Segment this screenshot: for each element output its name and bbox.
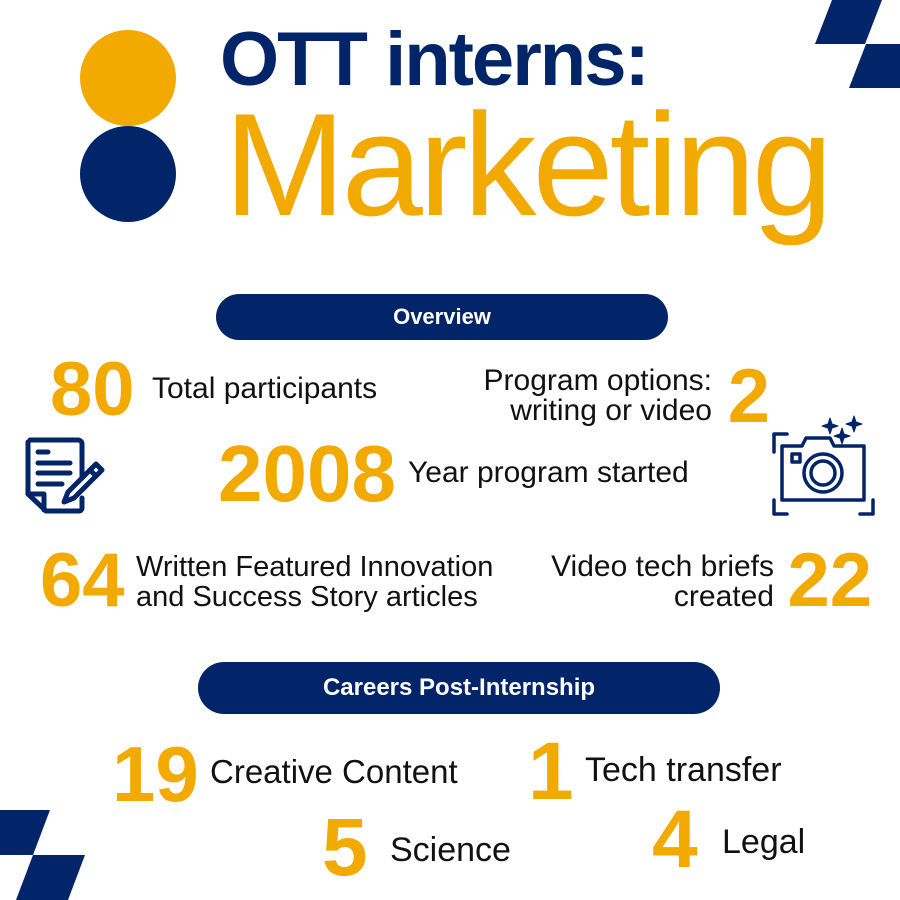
stat: 2: writing or video (510, 394, 712, 427)
heading: Careers Post-Internship (198, 662, 720, 714)
stat: 64: and Success Story articles (136, 581, 478, 613)
stat: 64: 64 (40, 538, 125, 623)
stat: 22 (551, 538, 872, 623)
stat: 2008 (218, 429, 689, 518)
stat: 80: 80 (50, 347, 135, 432)
career: 1 (528, 726, 782, 817)
title: Marketing (224, 83, 829, 246)
heading: Overview (216, 294, 668, 340)
career: 19: Creative Content (210, 753, 458, 790)
heading: Careers Post-Internship: Careers Post-Internship (323, 674, 595, 701)
career: 4: 4 (652, 794, 698, 885)
heading: Overview: Overview (393, 304, 491, 329)
stat: 2: 2 (728, 354, 770, 439)
stat: 2 (484, 354, 770, 439)
career: 5 (322, 802, 511, 893)
logo circles (80, 30, 176, 222)
career: 5: 5 (322, 802, 368, 893)
career: 19 (112, 730, 458, 818)
stat: 2008: Year program started (408, 456, 689, 489)
career: 1: Tech transfer (585, 751, 782, 789)
title: OTT interns: (220, 17, 648, 102)
stat: 2008: 2008 (218, 429, 396, 518)
stat: 22: 22 (787, 538, 872, 623)
career: 19: 19 (112, 730, 199, 818)
icon: camera (772, 416, 875, 516)
stat: 2: Program options: (484, 364, 712, 397)
stat: 80: Total participants (152, 372, 377, 405)
stat: 64 (40, 538, 493, 623)
stat: 22: created (674, 580, 774, 613)
icon: document with pencil (26, 438, 104, 514)
career: 4: Legal (722, 823, 805, 861)
stat: 64: Written Featured Innovation (136, 551, 493, 583)
career: 4 (652, 794, 805, 885)
stat: 22: Video tech briefs (551, 550, 774, 583)
career: 5: Science (390, 831, 511, 869)
stat: 80 (50, 347, 377, 432)
career: 1: 1 (528, 726, 574, 817)
